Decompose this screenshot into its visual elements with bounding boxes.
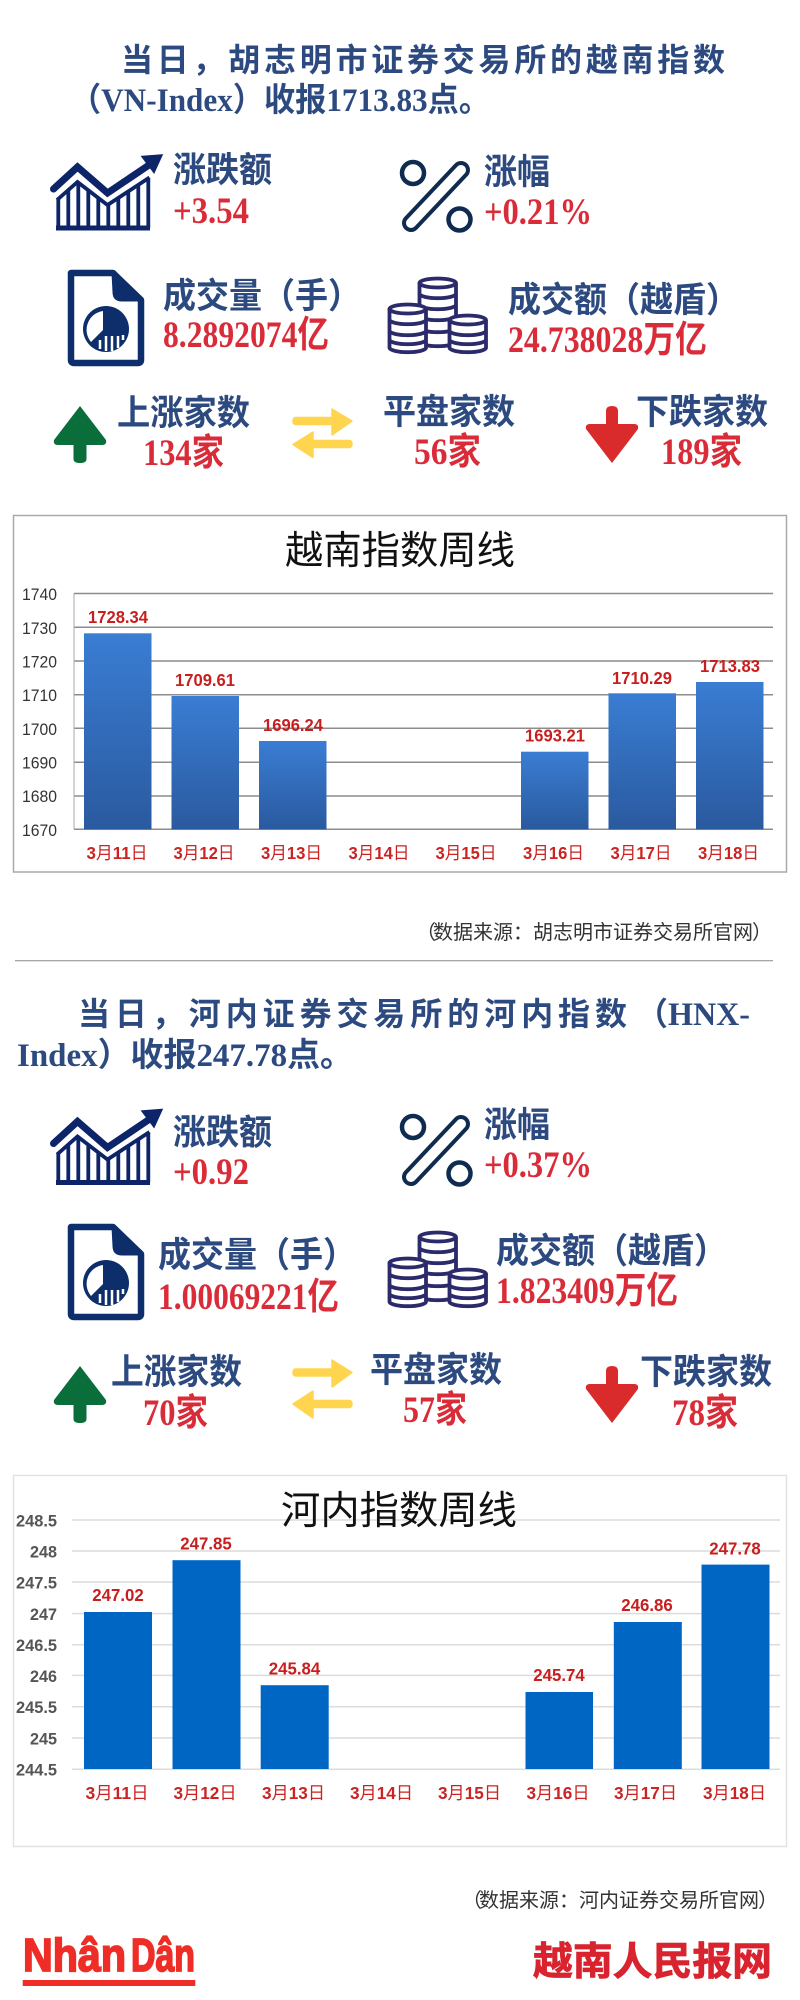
gridlines and y axis: 244.5: [16, 1760, 57, 1780]
bar value labels: 1710.29: [612, 668, 672, 688]
heading: HNX-Index close: [17, 996, 750, 1074]
bar value labels: 247.85: [180, 1534, 232, 1554]
stat: unchanged: [383, 393, 515, 473]
heading: VN-Index close: 当日，胡志明市证券交易所的越南指数: [121, 42, 725, 78]
icon: yellow exchange arrows: [293, 1360, 352, 1418]
gridlines and y axis: [22, 585, 773, 840]
gridlines and y axis: 1730: [22, 619, 57, 638]
source note: HOSE: （: [416, 921, 436, 944]
date labels: 3月12日: [174, 843, 234, 863]
date labels: 3月17日: [610, 843, 672, 863]
bar value labels: 247.78: [709, 1538, 761, 1558]
heading: VN-Index close: （VN-Index）收报1713.83点。: [70, 82, 490, 119]
stat: turnover: 1.823409万亿: [496, 1270, 678, 1312]
bar value labels: 1709.61: [175, 670, 235, 690]
gridlines and y axis: 1680: [22, 787, 57, 806]
icon: coin stacks: [389, 1232, 486, 1306]
heading: HNX-Index close: Index）收报247.78点。: [17, 1037, 353, 1074]
gridlines and y axis: 246: [30, 1667, 57, 1686]
bar value labels: 1728.34: [88, 607, 148, 627]
date labels: 3月14日: [348, 843, 410, 863]
stat: advancers: [111, 1353, 242, 1434]
stat: advancers: 134家: [143, 432, 224, 474]
heading: HNX-Index close: （: [636, 996, 668, 1032]
date labels: 3月18日: [703, 1783, 766, 1803]
stat: decliners: 下跌家数: [636, 393, 768, 432]
date labels: 3月11日: [86, 1783, 148, 1803]
logo: Nhan Dan: Dân: [131, 1929, 195, 1981]
date labels: 3月11日: [86, 843, 148, 863]
heading: VN-Index close: [70, 42, 725, 119]
stat: advancers: 70家: [143, 1392, 208, 1434]
chart title: 越南指数周线: [285, 530, 515, 573]
icon: document with pie chart: [71, 273, 141, 363]
stat: turnover: [496, 1232, 727, 1312]
panel: VN-Index weekly chart: [14, 516, 786, 872]
date labels: 3月12日: [174, 1783, 236, 1803]
date labels: 3月16日: [523, 843, 584, 863]
bar value labels: 247.02: [92, 1585, 144, 1605]
date labels: 3月13日: [262, 1783, 325, 1803]
gridlines and y axis: 1670: [22, 821, 57, 840]
chart title: 河内指数周线: [281, 1490, 517, 1533]
stat: change percent: [484, 153, 592, 233]
stat: volume: [158, 1236, 356, 1318]
gridlines and y axis: 248: [30, 1542, 57, 1562]
stat: change amount: 涨跌额: [173, 151, 272, 190]
date labels: 3月14日: [350, 1783, 413, 1803]
stat: change amount: +0.92: [173, 1152, 249, 1193]
gridlines and y axis: 245.5: [16, 1698, 57, 1717]
gridlines and y axis: 245: [30, 1730, 57, 1748]
icon: green up arrow: [54, 406, 106, 463]
icon: percent: [402, 162, 470, 230]
date labels: 3月15日: [438, 1783, 501, 1803]
date labels: [86, 843, 759, 863]
bar value labels: 246.86: [621, 1595, 673, 1615]
stat: change percent: +0.21%: [484, 192, 592, 233]
gridlines and y axis: 1740: [22, 585, 57, 604]
date labels: 3月18日: [698, 843, 759, 863]
stat: decliners: [640, 1353, 772, 1434]
gridlines and y axis: [16, 1512, 780, 1780]
gridlines and y axis: 247.5: [16, 1574, 57, 1592]
icon: rising chart: [54, 155, 162, 228]
bars: [84, 1560, 770, 1769]
stat: decliners: 78家: [672, 1392, 738, 1434]
stat: turnover: 成交额（越盾）: [496, 1232, 727, 1271]
stat: volume: 成交量（手）: [163, 277, 361, 316]
stat: decliners: 189家: [661, 431, 742, 473]
stat: volume: 1.00069221亿: [158, 1276, 339, 1318]
heading: HNX-Index close: 当日，河内证券交易所的河内指数: [78, 996, 627, 1032]
stat: volume: 成交量（手）: [158, 1236, 356, 1275]
source note: HNX: （: [462, 1889, 482, 1912]
stat: advancers: 上涨家数: [117, 394, 250, 433]
stat: decliners: 下跌家数: [640, 1353, 772, 1392]
gridlines and y axis: 1690: [22, 754, 57, 772]
stat: unchanged: 平盘家数: [383, 393, 515, 432]
bar value labels: 245.74: [533, 1665, 585, 1685]
stat: unchanged: 57家: [403, 1389, 467, 1431]
icon: yellow exchange arrows: [293, 409, 352, 458]
source note: HOSE: 数据来源：胡志明市证券交易所官网: [433, 921, 753, 944]
stat: change percent: 涨幅: [484, 153, 550, 192]
stat: change amount: [173, 1114, 272, 1193]
date labels: [86, 1783, 766, 1803]
bar value labels: [92, 1534, 761, 1685]
stat: unchanged: [370, 1351, 502, 1431]
icon: document with pie chart: [71, 1227, 141, 1317]
source note: HNX: ）: [758, 1889, 778, 1912]
stat: volume: 8.2892074亿: [163, 314, 329, 356]
stat: change percent: [484, 1106, 592, 1186]
source note: HNX: 数据来源：河内证券交易所官网: [479, 1889, 759, 1912]
date labels: 3月13日: [261, 843, 322, 863]
stat: change amount: +3.54: [173, 191, 249, 232]
bar value labels: [88, 607, 760, 746]
icon: red down arrow: [586, 1366, 638, 1423]
gridlines and y axis: 1720: [22, 652, 57, 672]
stat: turnover: 成交额（越盾）: [508, 281, 739, 320]
stat: volume: [163, 277, 361, 356]
bar value labels: 1693.21: [525, 726, 585, 746]
gridlines and y axis: 1710: [22, 686, 57, 705]
stat: change percent: +0.37%: [484, 1145, 592, 1186]
gridlines and y axis: 248.5: [16, 1512, 57, 1530]
panel: Ho Chi Minh exchange summary: [54, 42, 768, 474]
gridlines and y axis: 1700: [22, 720, 57, 739]
stat: turnover: [508, 281, 739, 361]
bar value labels: 245.84: [269, 1658, 321, 1678]
date labels: 3月16日: [526, 1783, 590, 1803]
date labels: 3月15日: [436, 843, 496, 863]
stat: change percent: 涨幅: [484, 1106, 550, 1145]
stat: unchanged: 平盘家数: [370, 1351, 502, 1390]
wordmark: Vietnamese People's Daily site: 越南人民报网: [533, 1941, 772, 1984]
stat: turnover: 24.738028万亿: [508, 319, 707, 361]
bar value labels: 1696.24: [263, 715, 323, 735]
bars: [84, 633, 764, 829]
icon: green up arrow: [54, 1366, 106, 1423]
gridlines and y axis: 247: [30, 1605, 57, 1624]
panel: HNX-Index weekly chart: [14, 1476, 786, 1846]
heading: HNX-Index close: HNX-: [668, 997, 750, 1033]
icon: rising chart: [54, 1110, 162, 1182]
icon: coin stacks: [389, 278, 486, 352]
stat: change amount: 涨跌额: [173, 1114, 272, 1152]
stat: decliners: [636, 393, 768, 473]
stat: advancers: [117, 394, 250, 474]
panel: Hanoi exchange summary: [17, 996, 772, 1434]
stat: unchanged: 56家: [414, 431, 481, 473]
stat: change amount: [173, 151, 272, 232]
bar value labels: 1713.83: [700, 656, 760, 676]
icon: percent: [402, 1116, 470, 1184]
date labels: 3月17日: [614, 1783, 677, 1803]
logo: Nhan Dan: Nhân: [23, 1929, 126, 1981]
source note: HOSE: ）: [752, 921, 772, 944]
gridlines and y axis: 246.5: [16, 1636, 57, 1655]
logo: Nhan Dan: [23, 1929, 195, 1986]
stat: advancers: 上涨家数: [111, 1353, 242, 1392]
icon: red down arrow: [586, 406, 638, 463]
